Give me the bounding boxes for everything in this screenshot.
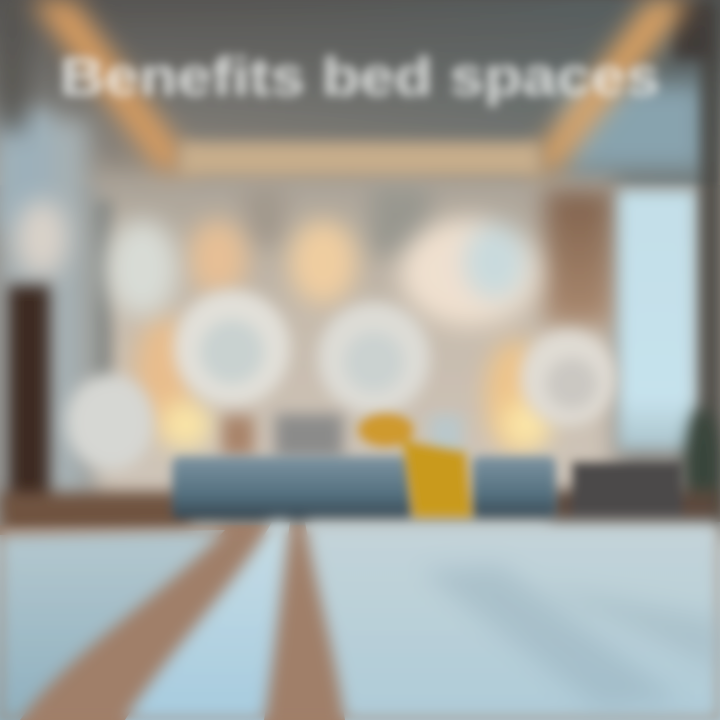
background: ceiling and walls — [0, 0, 720, 525]
white bedding stripes — [0, 522, 720, 720]
floor band — [0, 490, 720, 538]
circle top row — [106, 218, 540, 326]
yellow throw blanket — [358, 413, 472, 520]
bright lamp highlights — [160, 401, 550, 449]
bedding shadows — [420, 565, 720, 710]
left wall with dark doorway — [0, 0, 88, 540]
right wall: wood panel, bright window and dark edge — [545, 0, 720, 540]
sofa cushions — [222, 414, 462, 460]
ceiling light strips — [30, 0, 692, 176]
warm glow lights — [135, 220, 545, 450]
sofa — [172, 456, 682, 520]
circle middle row — [66, 290, 616, 470]
bed and floor base — [0, 528, 720, 720]
title: Benefits bed spaces — [60, 47, 660, 107]
